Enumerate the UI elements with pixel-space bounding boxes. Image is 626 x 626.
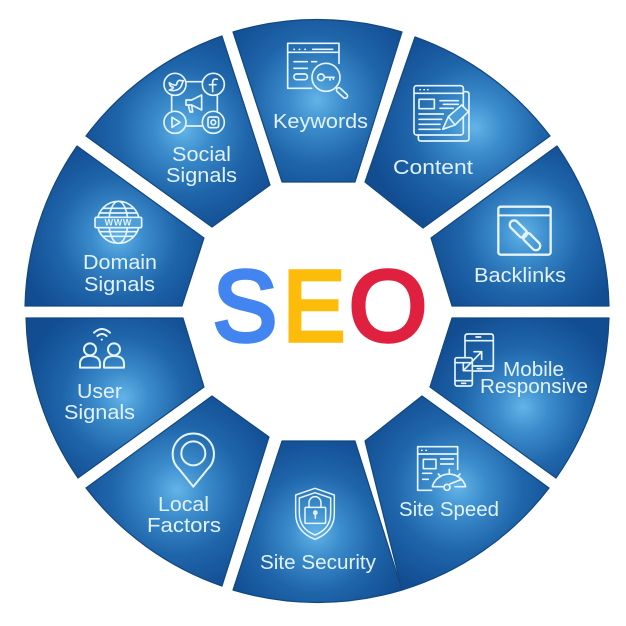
- label: Local Factors: [147, 494, 221, 537]
- segment: local factors: [86, 396, 269, 586]
- label: Backlinks: Backlinks: [474, 265, 566, 287]
- label: Site Speed: Site Speed: [399, 499, 499, 521]
- label: Domain Signals: [83, 252, 157, 296]
- panel: domain signals: [25, 146, 204, 306]
- label: Mobile Responsive: [480, 359, 588, 398]
- icon: browser with chain link: [498, 207, 551, 255]
- label: Content: Content: [393, 157, 473, 179]
- label: Domain Signals: Domain: [83, 252, 157, 274]
- title: SEO: O: [349, 251, 427, 363]
- segment: mobile responsive: [430, 318, 609, 478]
- label: Social Signals: Social: [172, 144, 231, 166]
- icon: keyword search window: [288, 43, 348, 99]
- icon: www globe: WWW: [105, 218, 132, 228]
- label: Local Factors: Factors: [147, 515, 221, 537]
- icon: shield and padlock: [296, 488, 334, 539]
- label: User Signals: Signals: [64, 402, 135, 424]
- segment: social signals: [86, 36, 270, 227]
- label: Mobile Responsive: Mobile: [503, 359, 564, 381]
- segment: site speed: [365, 396, 549, 590]
- label: Local Factors: Local: [158, 494, 209, 516]
- label: Keywords: Keywords: [273, 111, 368, 133]
- label: Social Signals: [166, 144, 237, 187]
- segment: backlinks: [431, 146, 609, 306]
- label: User Signals: User: [77, 381, 122, 403]
- segment: keywords: [233, 20, 402, 182]
- title: SEO: [213, 251, 427, 363]
- panel: backlinks: [431, 146, 609, 306]
- icon: users with wifi: [80, 329, 124, 368]
- panel: social signals: [86, 36, 270, 227]
- label: Domain Signals: Signals: [84, 274, 155, 296]
- icon: social media network: [164, 73, 224, 133]
- label: Site Security: Site Security: [260, 552, 376, 574]
- panel: site speed: [365, 396, 549, 590]
- segment: content: [365, 37, 550, 228]
- panel: content: [365, 37, 550, 228]
- label: User Signals: [64, 381, 135, 424]
- segment: user signals: [26, 318, 204, 478]
- panel: mobile responsive: [430, 318, 609, 478]
- icon: tablet and phone: [455, 334, 493, 386]
- icon: www globe: [95, 201, 142, 243]
- label: Mobile Responsive: Responsive: [480, 376, 588, 398]
- icon: map pin: [173, 433, 214, 487]
- title: SEO: E: [283, 251, 345, 363]
- segment: site security: [233, 441, 402, 602]
- segment: domain signals: [25, 146, 204, 306]
- label: Social Signals: Signals: [166, 165, 237, 187]
- panel: user signals: [26, 318, 204, 478]
- icon: window with speedometer: [418, 447, 466, 490]
- title: SEO: S: [213, 251, 277, 363]
- panel: site security: [233, 441, 402, 602]
- panel: keywords: [233, 20, 402, 182]
- icon: content page and pencil: [414, 86, 469, 141]
- panel: local factors: [86, 396, 269, 586]
